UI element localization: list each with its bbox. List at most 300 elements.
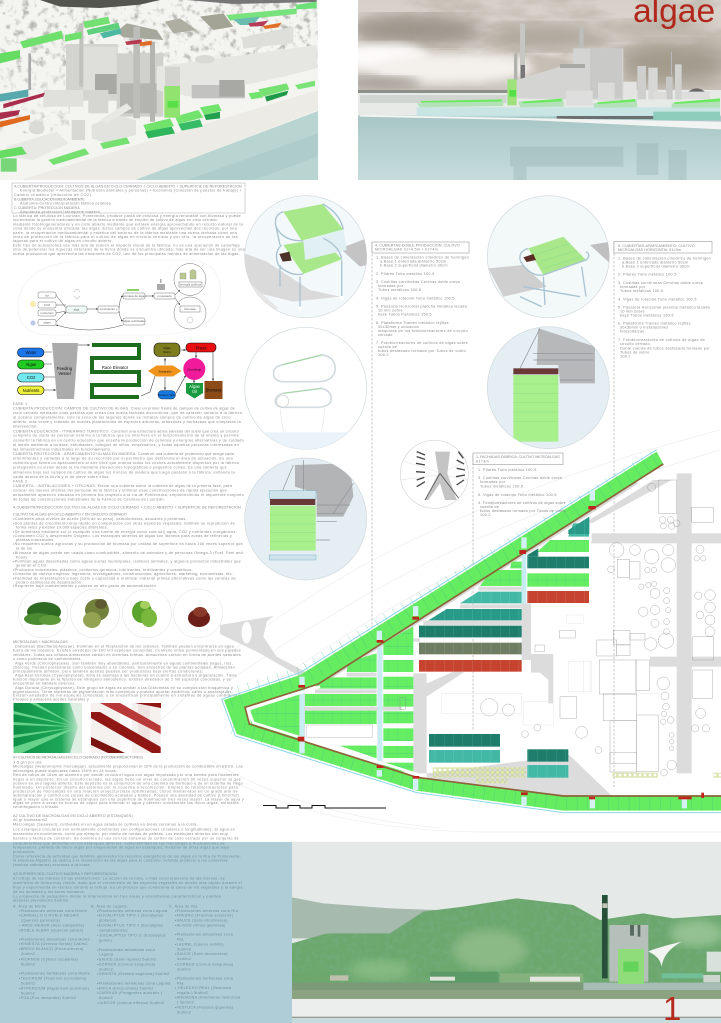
rocky terrain texture — [0, 0, 318, 67]
diagram: photobioreactor process: Oil — [192, 389, 197, 394]
text block: phases: al océano completamente, solo la zona de las lagunas donde se instalan campos de cultivo de algas de ciclo — [13, 416, 231, 420]
spec block: factory facades: 1. Pilares Tubo metálico 100.5 — [478, 468, 537, 472]
plan: green algae fields — [251, 523, 589, 772]
spec block: double production cover: 6. Plataforma Tramex metálico rejillas — [376, 321, 449, 325]
text block: phases — [13, 402, 244, 502]
spec block: parking cover: Tubos metálicos 100.5 — [620, 289, 663, 293]
text block: phases: FASE 1 — [13, 402, 27, 406]
text block: microalgae and macroalgae: Existen alrededor de mil especies conocidas, y se encuentran principalmente en sistemas de aguas continentales. — [13, 694, 245, 698]
text block: introduction: parte, la recuperación medioambiental y estética del entorno de la fábrica mediante una nueva fachada como una — [13, 231, 238, 235]
plant list: area C ria: •FESTUCA (Festuca gigantea) — [175, 1005, 234, 1009]
diagram: algae cycle: energía cultivos — [180, 282, 202, 286]
text block: introduction: Este tipo de actuaciones van más allá de reducir el impacto visual de la fábrica, no es una operación de camuflaje — [13, 243, 240, 247]
plant list: area A monte: •BREZO BLANCO (Erica arborea) — [19, 947, 84, 951]
section detail: double production cover isometric — [240, 196, 373, 318]
plant list: area C ria: •SAUCE (Salix atrocinerea) — [175, 952, 228, 956]
diagram: algae cycle: procesado — [157, 294, 172, 298]
feeding vessel — [52, 343, 78, 399]
diagram: algae cycle: crecimiento y — [100, 307, 118, 311]
spec block: double production cover: 1. Bases de cimentación cilíndrico de hormigón — [376, 256, 469, 260]
text block: microalgae and macroalgae: Alga Azul-Verdosa (Cyanophyceae). Está se asemeja a las bacterias en cuanto a estructura y organización. Tiene — [15, 673, 237, 677]
plant list: area C ria: Ría — [177, 937, 184, 941]
text block: phases: convertir la fábrica en un centro educativo que enseña la producción de celulosa y energías alternativas y de cuidado — [13, 438, 244, 442]
text block: phases: CUBIERTA PRODUCCION: CAMPOS DE CULTIVO DE ALGAS. Crear un primer frente de campos de cultivo de algas de — [13, 406, 235, 410]
photo: aerial view of the factory with algae covers — [0, 0, 318, 180]
text block: open and closed cycle cultivation — [13, 506, 243, 588]
section detail: double production cover side elevation — [240, 327, 373, 452]
diagram: photobioreactor process: Vessel — [58, 371, 71, 376]
text block: programme box: Amplianza protección Intemperie madera — [20, 210, 101, 214]
diagram: algae cycle: luz — [45, 294, 49, 298]
text block: microalgae and macroalgae: Alga Dorada (Chrysophyceae). Este grupo de algas es similar a las Diatomeas en su composición bioquímica y — [15, 686, 233, 690]
text block: microalgae and macroalgae: encuentran en hábitats diversos. — [13, 682, 76, 686]
spec block: double production cover: 3. Costillas curvilíneas Cerchas doble curva — [376, 280, 461, 284]
spec block: factory facades: cuerda de — [480, 505, 499, 509]
text block: open-cycle continuation and reforestation: de los animales y los seres humanos. — [13, 890, 85, 894]
text block: introduction: cinta de protección de la fábrica para el cultivo de algas en circuito cerrado y por otra, la recuperación de las — [13, 235, 238, 239]
text block: open-cycle macroalgae: Los estanques circulares son normalmente construidos con configuraciones circulares o longitudinales. El agua es — [13, 827, 235, 831]
spec block: double production cover: tubos desfasado formado por Tubos de vidrio — [378, 349, 466, 353]
plant list: area A monte: •ROBLE ALBAR (Quercus petrea) — [19, 928, 84, 932]
plant list: area B laguna: gunnii) — [99, 939, 113, 943]
text block: programme box — [12, 183, 245, 214]
plant list: area B laguna: •EUCALIPTUS TIPO 1 (Eucalyptus — [97, 914, 163, 918]
plant list: area A monte: 5ud/m2 — [21, 962, 35, 966]
plan: pale crossing lanes — [302, 537, 524, 777]
spec block: double production cover: máquinas de los fotobiorreactores de circuito — [378, 329, 468, 333]
dashed section lines — [372, 241, 614, 787]
spec block: parking cover — [614, 242, 712, 358]
spec block: double production cover: Tubos metálicos 100.5 — [378, 288, 421, 292]
text block: phases: intermitentes y variadas a lo largo de su recorrido por el perímetro que determina el área de actuación. Es una — [13, 456, 234, 460]
text block: closed-cycle microalgae: centrifugación o filtrado. — [13, 805, 60, 809]
plant list: area B laguna: •ERICA (Erica ciliata) 5ud/m2 — [97, 986, 154, 990]
text block: open-cycle continuation and reforestation: A3 SUPERFICIES: CULTIVO MADERA Y REFORESTACION — [13, 872, 117, 876]
text block: phases: FASE 2 — [13, 480, 27, 484]
spec block: factory facades — [473, 453, 566, 517]
spec block: parking cover: 2. Pilares Tubo metálico 100.5 — [618, 273, 677, 277]
plant list: area B laguna: • EUCALIPTUS TIPO 3: (Eucalyptus — [97, 934, 166, 938]
spec block: double production cover: 30x30mm y ubicación — [378, 325, 419, 329]
text block: open-cycle continuation and reforestation — [13, 841, 243, 903]
plant list: area C ria: •Plantaciones herbáceas zona — [175, 976, 234, 980]
plant list: area B laguna: •CARRIUS (Phragmites australis ) — [97, 991, 163, 995]
text block: open-cycle continuation and reforestation: El influjo de las mareas en las plantaciones. La acción de la luna, o más concretamente de las mareas, se — [13, 877, 225, 881]
spec block: factory facades: 4. Fotobiorreactores de cultivos de algas sobre — [478, 501, 566, 505]
factory buildings — [7, 13, 317, 160]
text block: microalgae and macroalgae: Diatomeas (Bacillariophyceae). Dominan en el fitoplancton de los océanos. También pueden encontrarse en agua — [15, 644, 235, 648]
plan: white island and ellipse — [242, 622, 252, 643]
text block: phases: abierto, más verde y rodeado de nuevas plantaciones de especies arbóreas, arbustivas y herbáceas que completan la — [13, 420, 242, 424]
plan: perimeter algae strip — [222, 450, 721, 813]
text block: closed-cycle microalgae — [13, 755, 244, 809]
diagram: photobioreactor process — [18, 343, 222, 399]
text block: open and closed cycle cultivation: •No requieren suelos agrícolas y su producción de biomasa por unidad de superficie es hasta 100 veces superior que — [13, 542, 243, 546]
text block: introduction: nueva producción que aprovecha las emisiones de CO2, uno de los principales fuentes de alimentación de las Algas. — [13, 252, 240, 256]
plant list: area A monte: •Plantaciones arbustivas zona Monte — [19, 937, 90, 941]
text block: open and closed cycle cultivation: •Biomasa de algas puede ser usada como combustible, alimento de animales y de personas Omega-3 (Fuel, Feel and — [13, 551, 243, 555]
spec block: parking cover: 6. Plataforma Tramex metálico rejillas — [618, 322, 691, 326]
plant list: area C ria: •ALISOS (Alnus glutinosa) — [175, 924, 226, 928]
plant list: area C ria: •Plantaciones arbustivas zona — [175, 933, 234, 937]
spec block: double production cover: 4. CUBIERTAS-DOBLE PRODUCCION: CULTIVO — [375, 244, 460, 248]
text block: microalgae and macroalgae: Alga Verde (Chlorophyceae). Son también muy abundantes, particularmente en aguas continentales (lagos, ríos, — [15, 661, 233, 665]
plan: teal algae fields — [419, 517, 589, 778]
text block: phases: CUBIERTA PROTECCION - APARCAMIENTO+ALMACEN MADERA. Construir una cubierta de protección que acoge cada — [13, 452, 235, 456]
text block: programme box: Energía Biodiesel + Alimentación (Nutrición animales y personas) + Economía (Creación de puestos de trabajo) + — [20, 189, 242, 193]
beach and road — [20, 90, 318, 180]
plant list: area C ria: •ANEMONA (Anemonas nemorosa — [175, 996, 241, 1000]
plan: red markers — [298, 506, 704, 799]
plan: grey-brown field — [419, 643, 522, 654]
text block: microalgae and macroalgae: charcos). Pueden presentarse como unicelulares o en colonias. Son ancestros de las plantas actuales. Almacenan — [13, 666, 235, 670]
recovery tank — [158, 390, 176, 399]
plant list: area C ria: 5ud/m2 — [177, 1010, 191, 1014]
plant list: area B laguna: 5ud/m2 — [99, 996, 113, 1000]
text block: programme box: Anatomía-Centro Interpretación fábrica celulosa — [20, 202, 112, 206]
plant silhouette — [507, 23, 710, 106]
spec block: double production cover: base Tubos metálicos 150.5 — [378, 312, 432, 316]
plant list: area B laguna: Laguna — [99, 953, 114, 957]
text block: open-cycle continuation and reforestation: la empresa Algamar se dedica a la recolección de las algas para el consumo, vendida producto a las conservas — [13, 859, 228, 863]
plant list: area B laguna: •EUCALIPTUS TIPO 2 (Eucalyptus — [97, 924, 163, 928]
plan: strip grid — [230, 457, 660, 698]
forest hill — [292, 898, 721, 985]
diagram: photobioreactor process: Algae — [189, 384, 201, 389]
text block: open-cycle continuation and reforestation: producción. — [13, 850, 35, 854]
text block: closed-cycle microalgae: algas se pone a secar en hornos de vapor para eliminar el agua y obtener únicamente las micro-algas, mediante — [13, 801, 239, 805]
plant list: area B laguna: globulus) — [99, 919, 117, 923]
icon: green algae top — [127, 289, 139, 291]
plant list: area A monte: 5ud/m2 — [21, 981, 35, 985]
section detail: parking cover plan — [487, 327, 609, 449]
water — [292, 999, 721, 1022]
plant list: area A monte: • ARCE MENOR (Acer campestre) — [19, 924, 85, 928]
shore bank — [292, 990, 721, 999]
algae circle 1 — [18, 589, 68, 638]
text block: closed-cycle microalgae: automatización y control con curvas de crecimiento acotadas y fiables. Poseen una densidad de cultivo (Lt/m2/m2) — [13, 793, 239, 797]
plant list: area B laguna: •SAUCE (Salix repens) 5ud/m2 — [97, 957, 157, 961]
icon: droplet — [30, 320, 36, 326]
spec block: factory facades: tubos desfasado formado por Tubos de vidrio — [480, 509, 566, 513]
text block: phases: cubierta que forma un aparcamiento al aire libre que ordena todos los coches actualmente dispersos por la fábrica — [13, 461, 240, 465]
icon: chimney — [157, 279, 165, 290]
text block: open and closed cycle cultivation: •Son plantas de crecimiento muy rápido en comparación con otras especies vegetales, también se reproducen de — [13, 521, 235, 525]
text block: open-cycle continuation and reforestation: alcanzar pluviómetro 5ud/m2 — [13, 899, 68, 903]
plant list: area A monte: 5ud/m2 — [21, 991, 35, 995]
plan: inner road along the upper strip — [322, 482, 637, 682]
text block: phases: CUBIERTA - INSTALACIONES + OFICINAS. Elevar una cubierta sobre la cubierta de algas de la primera fase, para — [13, 484, 233, 488]
text block: phases: al medio ambiente a turistas, estudiantes, colegios de niños, empresarios, y todas aquellas personas interesadas en — [13, 443, 239, 447]
biomass — [204, 381, 222, 399]
plant list: area C ria — [169, 904, 241, 1014]
text block: closed-cycle microalgae: A? CULTIVOS DE MICROALGAS EN CICLO CERRADO (FOTOBIORREACTORES) — [13, 755, 143, 759]
text block: phases: ciclo cerrado mediante unas pasillas que crean una nueva fachada discontinua, que da carácter unitario a la fábrica — [13, 411, 243, 415]
text block: microalgae and macroalgae — [13, 640, 245, 702]
arrows — [44, 345, 213, 396]
text block: open and closed cycle cultivation: la de los — [16, 546, 32, 550]
section detail: parking cover isometric — [487, 196, 610, 318]
spec block: parking cover: a.Base 1 enterrada diámetro 50cm — [622, 260, 688, 264]
plant list: area C ria: C. Área de Ría — [169, 904, 198, 908]
text block: closed-cycle microalgae: 3-5 gr/l por día — [13, 760, 42, 764]
text block: phases: almacena bajo sus campos de cultivo de algas los troncos de madera que luego pasarán a la fábrica, evitando la — [13, 470, 236, 474]
text block: programme box: A CUBIERTA/PRODUCCION: CULTIVOS DE ALGAS EN CICLO CERRADO + CICLO ABIERTO + SUPERFICIE DE REFORESTACION — [14, 184, 242, 188]
algae samples — [18, 589, 222, 638]
plant list: area C ria: ) 5ud/m2 — [177, 1001, 194, 1005]
diagram: photobioreactor process: Press — [196, 345, 206, 350]
text block: microalgae and macroalgae: o como polímeros de carbohidratos. — [13, 657, 82, 661]
far hill — [292, 897, 437, 938]
spec block: parking cover: 4. Vigas de rotación Tubo metálico 100.5 — [618, 297, 697, 301]
spec block: factory facades: formadas por — [480, 480, 506, 484]
spec block: factory facades: 3. Costillas curvilíneas Cerchas doble curva — [478, 476, 563, 480]
spec block: parking cover: 5. CUBIERTAS-APARCAMIENTO: CULTIVO — [618, 244, 695, 248]
text block: phases: de todas las construcciones industriales de la Fábrica de Celulosa de Lourizán. — [13, 498, 165, 502]
plan: factory buildings and tanks — [400, 480, 715, 776]
text block: open-cycle macroalgae: Macroalgas (Seaweed), cultivadas en un agua salada se cultivan en áreas cercanas a la costa. — [13, 823, 198, 827]
plant list: area A monte: A. Área de Monte — [13, 904, 47, 908]
text block: microalgae and macroalgae: pigmentación. Tiene sistemas de pigmentación más complejos y pueden aportar amarillos, cafés o anaranjados. — [13, 690, 233, 694]
algae oil — [186, 383, 203, 398]
plan: strip outer cyan outline — [222, 450, 721, 813]
spec block: parking cover: Tubos de vidrio — [620, 350, 650, 354]
algae covers on shore — [360, 98, 721, 129]
diagram: photobioreactor process: Nutrients — [23, 388, 39, 393]
spec block: double production cover: cerrado — [378, 333, 393, 337]
diagram: algae cycle: nutrientes — [40, 311, 54, 315]
press — [186, 343, 216, 352]
text block: open-cycle continuation and reforestation: temperatura, pérdida de micro-algas por evaporación de agua en estanques, invasión de otras algas que baja — [13, 846, 230, 850]
text block: microalgae and macroalgae: principalmente almidón, pero también aceites pueden ser producidos bajo ciertas condiciones. — [13, 669, 203, 673]
spec block: parking cover: Doble cuerda de tubos desfasado formado por — [620, 346, 710, 350]
text block: open and closed cycle cultivation: Food) — [16, 555, 28, 559]
photo: red bioreactor tubes — [91, 703, 161, 753]
plant list: area A monte: •Plantaciones herbáceas zona Monte — [19, 971, 90, 975]
reflection — [510, 143, 687, 180]
text block: open and closed cycle cultivation: •Contienen altos niveles de aceite [50% de su peso], carbohidratos, azucares y proteínas. — [13, 517, 187, 521]
plant list: area A monte: 2ud/m2 — [21, 952, 35, 956]
text block: closed-cycle microalgae: llegar a un depósito. En un circuito cerrado, las algas tiene un nivel de concentración 30 veces superior al que — [13, 777, 241, 781]
spec block: parking cover: 30x30mm o instalaciones — [620, 326, 669, 330]
plant list: area C ria: •CORNUS (Cornus sanguinea) — [175, 962, 234, 966]
plant list: area C ria: •LAUREL (Laurus nobilis) — [175, 942, 224, 946]
icon: drying marks — [74, 289, 80, 298]
spec block: parking cover: circuito cerrado. — [620, 342, 651, 346]
algae circle 4 — [174, 589, 222, 638]
spec block: parking cover: fotovoltaicas — [620, 330, 644, 334]
site plan — [220, 450, 721, 813]
text block: open-cycle continuation and reforestation: Como referencia de actividad que también aprovecha los recursos energéticos de las algas en la Ría de Pontevedra, — [13, 854, 241, 858]
algae slurry — [154, 343, 180, 356]
text block: phases: las infraestructuras industriales en funcionamiento. — [13, 448, 111, 452]
text block: closed-cycle microalgae: poseen en uno laguna abierta. Este depósito es la conjunción de una columna de burbujeo y de un sistema de riego — [13, 781, 243, 785]
plant list: area A monte — [13, 904, 90, 1000]
section detail: double production cover plan — [245, 458, 367, 580]
algae circle 3 — [122, 589, 172, 638]
scale bar — [263, 806, 386, 808]
spec block: factory facades: 01=3m — [476, 460, 489, 464]
feed pills — [18, 348, 44, 357]
shoreline cover strip — [292, 972, 721, 993]
diagram: photobioreactor process: Recovery Tank — [158, 394, 175, 397]
text block: microalgae and macroalgae: función importante en la fijación de nitrógeno atmosférico. Existen alrededor de 2 mil especies conocidas, y se — [13, 678, 231, 682]
spec block: double production cover: 5. Pasarela Horizontal plancha metálica lacada — [376, 304, 468, 308]
text block: introduction: lagunas para el cultivo de algas en circuito abierto. — [13, 239, 113, 243]
spec block: factory facades: Tubos metálicos 100.5 — [480, 484, 523, 488]
spec block: double production cover: 4. Vigas de rotación Tubo metálico 100.5 — [376, 296, 455, 300]
text block: open-cycle continuation and reforestation: (anchoa submarina) cercanas a la costa. — [13, 863, 91, 867]
plant list: area C ria: •Plantaciones arbóreas zona Ría — [175, 909, 239, 913]
text block: phases: completo de visita de personal externo a la fábrica que no interfiere en el funcionamiento de la misma y permite — [13, 434, 239, 438]
text block: microalgae and macroalgae: celulares. Todas sus células almacenan carbón en diversas formas. Almacenan carbón en forma de aceites naturales — [13, 653, 241, 657]
plan: roads — [220, 473, 721, 797]
text block: open-cycle macroalgae: baratos y fáciles de construir. Se combina su uso con los sistemas de cultivo de ciclo cerrado por un conjunto de — [13, 837, 239, 841]
plan: crossings — [302, 491, 684, 808]
plant list: area C ria: • HELECHO REAL (Osmunda — [175, 986, 232, 990]
text block: open and closed cycle cultivation: •Productos industriales: plásticos, productos químicos, lubricantes, fertilizantes y cosméticos. — [13, 568, 193, 572]
plan: white inner margin — [248, 687, 417, 774]
plant list: area A monte: •TEUCRIUM (Teucrium scorodonia) — [19, 976, 87, 980]
plant list: area C ria: regalis ) 5ud/m2 — [177, 991, 208, 995]
plan: olive tree groves — [433, 767, 721, 783]
diagram: photobioreactor process: Biomass — [205, 388, 222, 392]
diagram: photobioreactor process: Slurry — [163, 350, 171, 354]
plant list: area C ria: 3ud/m2 — [177, 957, 191, 961]
diagram: photobioreactor process: Separator — [158, 369, 172, 373]
diagram: photobioreactor process: Race Elevator — [102, 365, 129, 370]
text block: closed-cycle microalgae: Microalgas (Heterotrophic microalgae), actualmente proporcionan el 10% de la producción de combustible en EEUU. Las — [13, 765, 243, 769]
text block: introduction: incrementar la gestión medioambiental de la fábrica a través de empleo de cultivo de algas en ciclo cerrado — [13, 218, 217, 222]
plan: faint service drawings — [442, 615, 660, 725]
text block: open and closed cycle cultivation: •Purifican aguas desechadas como aguas sucias municipales, residuos animales, y algunos productos industriales que — [13, 560, 241, 564]
spec block: parking cover: 5. Pasarela Horizontal plancha metálica lacada — [618, 305, 711, 309]
spec block: parking cover: formadas por — [620, 285, 646, 289]
text block: open and closed cycle cultivation: •Facilidad de implantación a bajo coste y capacidad a reutilizar material primas alternativas como las cenizas de — [13, 576, 236, 580]
plant list: area C ria: Ría — [177, 981, 184, 985]
plant list: area A monte: •HYPERICUM (Hypericum pulchrum) — [19, 986, 90, 990]
spec block: parking cover: base Tubos metálicos 150.5 — [620, 314, 674, 318]
text block: introduction: mediante fotobiogeneradores y en ciclo abierto mediante que extraen energía aprovechando un recurso natural de la — [13, 222, 244, 226]
text block: open and closed cycle cultivation: generan el CO2 — [16, 564, 46, 568]
diagram: algae cycle: CO2 — [44, 303, 50, 307]
text block: closed-cycle microalgae: producción de microalgas en una relación proyecto/clase optimizadas; ciclos mantenidos en un grado alto de — [13, 789, 238, 793]
spec block: parking cover: b.Base 2 superficial diámetro 30cm — [622, 264, 690, 268]
text block: programme box: C CUBIERTA: PROTECCION MADERA — [14, 206, 80, 210]
text block: programme box: Cambio climático (reducción de CO2) — [14, 193, 91, 197]
photo: view of the factory from the water — [330, 0, 721, 180]
text block: phases: CUBIERTA EDUCACION - ITINERARIO TURISTICO. Construir una estructura aérea elevada del suelo que crea un circuito — [13, 429, 239, 433]
spec block: parking cover: 3. Costillas curvilíneas Cerchas doble curva — [618, 281, 704, 285]
text block: open-cycle macroalgae: mantenida en movimiento, como por ejemplo, por medio de ruedas de paletas. Los estanques abiertos son muy — [13, 832, 228, 836]
plant list: area A monte: •PIORNOS (Cytisus scoparius) — [19, 957, 79, 961]
spec block: parking cover: MICROALGAS HORIZONTAL 01=3m — [618, 248, 681, 252]
icon: lamp — [187, 317, 193, 323]
plant list: area A monte: •POA (Poa nemoralis) 5ud/m2 — [19, 996, 76, 1000]
text block: open and closed cycle cultivation: •Requieren bajo mantenimiento y poseen un alto grado de automatización — [13, 584, 156, 588]
text block: open-cycle continuation and reforestation: manifiesta de forma muy visible, dado que el crecimiento de las especies vegetales es mucho más rápido durante el — [13, 881, 242, 885]
text block: introduction: zona donde se encuentra ubicada: las algas. Estos campos de cultivo de algas aprovechan dos recursos: por una — [13, 227, 238, 231]
spec block: double production cover: MICROALGAS h1=4,5m + h2=4m — [375, 248, 438, 252]
spec block: double production cover: 100.2 — [378, 353, 389, 357]
diagram: photobioreactor process: Feeding — [57, 366, 73, 371]
spec block: parking cover: 1. Bases de cimentación cilíndrico de hormigón — [618, 256, 711, 260]
text block: phases: colocar los nuevos oficinas del personal de la fábrica y eliminar esas construcciones de rápida ejecución que — [13, 488, 227, 492]
text block: phases: actualmente aparecen situadas en primera fila respecto a la ría de Pontevedra, empobreciendo el imponente conjunto — [13, 493, 244, 497]
text block: open and closed cycle cultivation: •Consumen CO2 y desprenden Oxígeno. Los estanques abiertos de algas son idóneos para zonas de refinerías y — [13, 534, 232, 538]
text block: introduction: Lo fábrica de celulosa de Lourizán, Pontevedra, produce pasta de celulosa y energía renovable con biomasa y puede — [13, 214, 241, 218]
photo: green bioreactor tubes — [14, 703, 82, 753]
plant list: area B laguna: •Plantaciones arbóreas zona Laguna — [97, 909, 168, 913]
shore — [358, 90, 721, 117]
text block: introduction: sino de potenciar los riquezas naturales de la tierra donde se encuentra ubicada; más allá de ser una imagen es una — [13, 248, 246, 252]
factory — [602, 895, 721, 984]
text block: open and closed cycle cultivation: •Creación de nuevos empleos: ingeniería, investigadores, construcciones, agricultores, marketing, economistas, etc. — [13, 572, 233, 576]
text block: open-cycle continuation and reforestation: La propuesta de paisajismo divide la intervención en tres áreas y ecosistemas característicos y plantea — [13, 894, 222, 898]
spec block: double production cover: formadas por — [378, 284, 404, 288]
text block: open-cycle macroalgae: 40 gr biomasa/m2 — [13, 818, 47, 822]
plant list: area B laguna: •GENISTA (Genista saginosa) 5ud/m2 — [97, 972, 170, 976]
diagram: algae cycle: biomasa de algas — [122, 294, 146, 298]
section detail: perspective of tunnel — [400, 440, 470, 508]
plant list: area A monte: •CARBALLO O ROBLE NEGRO — [19, 914, 79, 918]
plant list: area A monte: •HINIESTA (Genista florida) 1ud/m2 — [19, 942, 88, 946]
plant list: area B laguna: B. Área de Laguna — [91, 904, 128, 908]
plan: brown inner line — [245, 464, 721, 796]
diagram: algae cycle: algas — [43, 320, 51, 324]
spec block: parking cover: 7. Fotobiorreactores de cultivos de algas de — [618, 338, 705, 342]
spec block: double production cover: 2. Pilares Tubo metálico 100.5 — [376, 272, 435, 276]
text block: open-cycle macroalgae — [13, 814, 239, 841]
spec block: factory facades: 5. Vigas de rotación Tubo metálico 100.5 — [478, 493, 557, 497]
plant list: area C ria: •SAUCE (Salix atrocinerea) — [175, 919, 228, 923]
spec block: double production cover: cuerda de — [378, 345, 397, 349]
plant list: area B laguna: •Plantaciones herbáceas zona Laguna — [97, 981, 171, 985]
text block: microalgae and macroalgae: MICROALGAS + MACROALGAS — [13, 640, 68, 644]
spec block: double production cover: 10 mm sobre — [378, 308, 403, 312]
sea — [135, 111, 318, 180]
plan: red fields — [419, 591, 589, 672]
text block: open-cycle macroalgae: A2 CULTIVO DE MACROALGAS EN CICLO ABIERTO (ESTANQUES) — [13, 814, 133, 818]
algae circle 2 — [70, 589, 120, 638]
separator — [148, 366, 182, 376]
plant list: area A monte: •Plantaciones arbóreas zona Monte — [19, 909, 87, 913]
text block: phases: intervención. — [13, 424, 38, 428]
plant list: area B laguna: •Plantaciones arbustivas zona — [97, 948, 156, 952]
text block: open and closed cycle cultivation: A CUBIERTA/PRODUCCION CULTIVO DE ALGAS EN CICLO CERRADO + CICLO ABIERTO + SUPERFICIE DE REFORESTACION — [13, 506, 241, 510]
diagram: photobioreactor process: Centrifuge — [187, 367, 202, 371]
plant list: area B laguna — [91, 904, 171, 1005]
text block: closed-cycle microalgae: microalgas puede duplicarse hasta 150% en 24 horas. — [13, 769, 117, 773]
text block: closed-cycle microalgae: iluminado. Un posterior diseño del sistema por lo cosecha o recolección. Empleo de fotobiorreactores para — [13, 785, 239, 789]
text block: introduction — [13, 214, 246, 256]
spec block: parking cover: 100.2 — [620, 354, 631, 358]
text block: open and closed cycle cultivation: soda o salmueras de desalización — [16, 580, 81, 584]
plant list: area B laguna: 3ud/m2 — [99, 967, 113, 971]
text block: phases: protegiendo su visión desde la ría mediante elevaciones topográficas o pequeños cortes. Es una cubierta que — [13, 466, 227, 470]
algae covers — [0, 2, 317, 172]
text block: microalgae and macroalgae: Produce y almacena aceites naturales y — [13, 698, 89, 702]
diagram: algae cycle — [18, 260, 220, 335]
text block: microalgae and macroalgae: fuera de los océanos. Existen alrededor de 100 mil especies conocidas. Contiene sílice pulimentado en sus paredes — [13, 649, 241, 653]
faint site contour lines — [160, 430, 721, 832]
bottom blue band — [0, 842, 292, 1023]
text block: open-cycle continuation and reforestation: características que dificultan en los estanques abiertos: vulnerabilidad de las microalgas a fluctuaciones de — [13, 841, 225, 845]
text block: closed-cycle microalgae: Red de tubos de 16cm de diámetro por donde circula el agua con algas impulsada por una bomba para finalmente — [13, 773, 239, 777]
text block: open-cycle continuation and reforestation: flujo y experimenta un retraso durante el reflujo. Es un proceso que condiciona la savia de los vegetales y la sangre — [13, 885, 243, 889]
text block: open and closed cycle cultivation: •Se alimentan mediante sol (o cualquier otra fuente de energía como sola sal) agua, CO2 y nutrientes inorgánicos. — [13, 530, 237, 534]
text block: programme box: B CUBIERTA: EDUCACION MEDIOAMBIENTE — [14, 197, 85, 201]
